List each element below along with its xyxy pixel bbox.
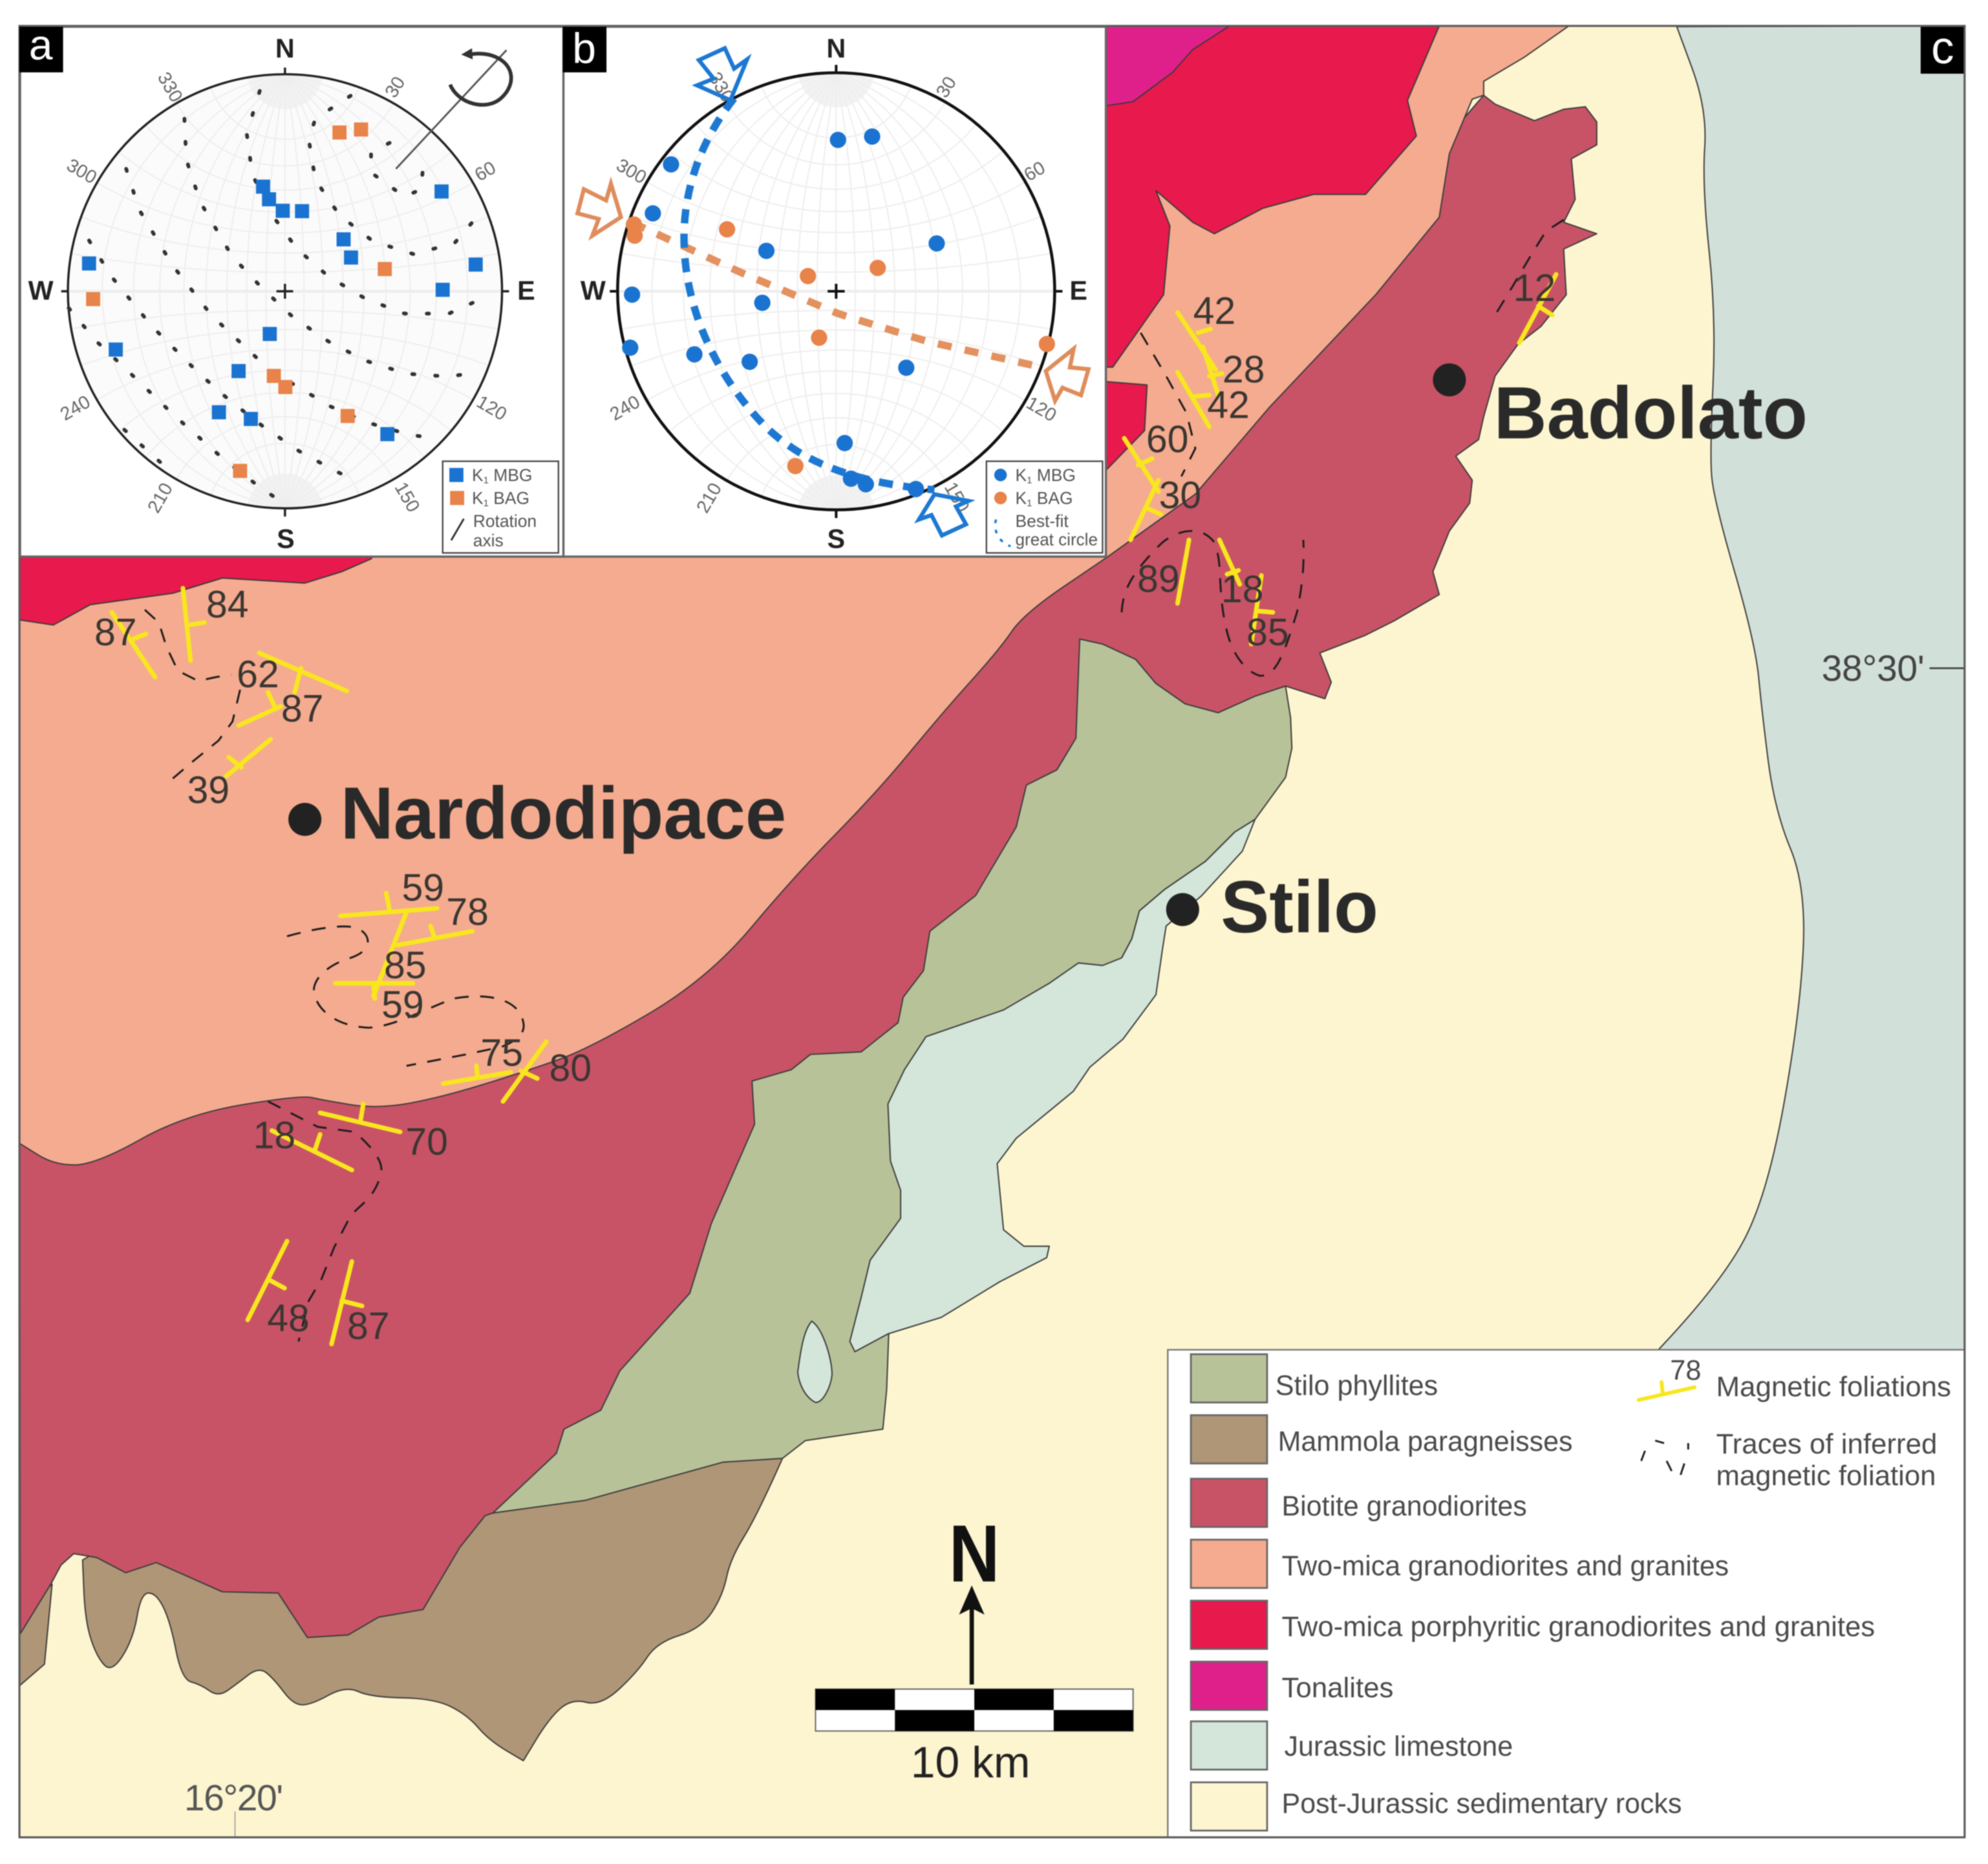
stereonet a azimuth labels: 30 — [381, 73, 409, 102]
stereonet a azimuth labels: 210 — [144, 480, 177, 517]
legend entry: Post-Jurassic sedimentary rocks: Post-Jurassic sedimentary rocks — [1282, 1788, 1682, 1819]
stereonet b cardinal labels: W — [581, 276, 606, 306]
stereonet b legend: 1 — [1027, 475, 1032, 486]
legend entry: Two-mica porphyritic granodiorites and granites: Two-mica porphyritic granodiorites and granites — [1282, 1612, 1875, 1643]
rotation axis with curved arrow — [396, 48, 511, 169]
stereonet b legend — [987, 461, 1102, 553]
foliation dip values: 87 — [94, 612, 137, 654]
foliation dip values: 12 — [1513, 268, 1555, 310]
stereonet a interior tint — [68, 74, 502, 508]
foliation dip values: 89 — [1137, 559, 1180, 601]
stereonet b legend: BAG — [1032, 488, 1073, 508]
north arrow: N — [949, 1508, 999, 1599]
best-fit great circle MBG blue dashed — [684, 98, 934, 490]
stereonet b cardinal labels: S — [828, 524, 845, 554]
stereonet b legend: MBG — [1032, 466, 1076, 485]
stereonet a azimuth labels: 120 — [473, 392, 510, 425]
foliation dip values — [94, 268, 1555, 1347]
panel label b — [562, 25, 606, 72]
stereonet b azimuth labels: 150 — [940, 478, 974, 516]
stereonet b azimuth labels: 120 — [1023, 392, 1060, 426]
foliation dip values: 18 — [1221, 568, 1263, 610]
legend entry: Biotite granodiorites: Biotite granodiorites — [1282, 1491, 1527, 1522]
legend entry: Jurassic limestone — [1191, 1721, 1513, 1770]
map unit: two-mica granodiorites and granites — [19, 26, 1569, 1165]
stereonet a legend: K — [472, 466, 484, 485]
stereonet a legend — [443, 461, 559, 553]
stereonet a K1 MBG blue squares — [82, 180, 483, 441]
north arrow — [949, 1508, 999, 1684]
stereonet a K1 BAG orange squares — [86, 122, 392, 478]
foliation dip values: 42 — [1193, 290, 1235, 332]
panel label b: b — [572, 25, 596, 72]
town: Stilo: Stilo — [1221, 866, 1378, 948]
stereonet a legend: 1 — [484, 475, 489, 486]
stereonet a rim and ticks — [61, 67, 509, 517]
foliation dip values: 59 — [402, 867, 444, 909]
foliation dip values: 59 — [381, 984, 424, 1026]
foliation dip values: 48 — [267, 1298, 310, 1340]
foliation dip values: 80 — [549, 1047, 592, 1089]
stereonet a legend: axis — [473, 531, 504, 550]
foliation dip values: 60 — [1146, 418, 1188, 460]
foliation dip values: 62 — [237, 654, 279, 696]
legend contents — [1191, 1355, 1951, 1830]
panel label c — [1921, 22, 1965, 74]
legend entry: magnetic foliations: 78 — [1670, 1355, 1701, 1386]
stereonet a azimuth labels: 330 — [153, 69, 187, 106]
legend entry: Stilo phyllites: Stilo phyllites — [1276, 1370, 1438, 1401]
legend entry: Post-Jurassic sedimentary rocks — [1191, 1783, 1682, 1830]
stereonet b azimuth labels: 30 — [932, 73, 961, 102]
stereonet a azimuth labels: 150 — [390, 478, 423, 516]
foliation dip values: 87 — [347, 1305, 390, 1347]
legend entry: Mammola paragneisses: Mammola paragneisses — [1278, 1426, 1572, 1457]
scale bar: 10 km — [911, 1739, 1030, 1787]
legend entry: Jurassic limestone: Jurassic limestone — [1284, 1731, 1513, 1762]
stereonet b grid — [617, 72, 1055, 510]
scale bar — [815, 1689, 1133, 1787]
stereonet b legend: 1 — [1027, 498, 1032, 509]
stereonet a cardinal labels: N — [275, 34, 295, 63]
stereonet a legend: K — [472, 488, 484, 508]
foliation dip values: 30 — [1159, 475, 1201, 517]
stereonet b azimuth labels: 240 — [606, 392, 644, 425]
stereonet a azimuth labels: 240 — [57, 392, 94, 425]
stereonet a legend: 1 — [484, 498, 489, 509]
arrow: orange hollow left — [577, 184, 621, 235]
limestone lens — [798, 1321, 832, 1402]
stereonet b azimuth labels: 330 — [704, 69, 738, 106]
stereonet a azimuth labels — [57, 69, 510, 517]
map unit: sea area in pale grey-green — [1659, 26, 1965, 1359]
foliation dip values: 78 — [446, 891, 489, 933]
stereonet b K1 BAG orange circles — [626, 217, 1055, 474]
panel label a: a — [29, 21, 53, 69]
foliation dip values: 75 — [480, 1032, 523, 1074]
stereonet a cardinal labels: W — [28, 276, 54, 306]
map unit: two-mica porphyritic granodiorites and granites — [19, 26, 1439, 625]
stereonet b rim and ticks — [610, 65, 1062, 518]
stereonet a cardinal labels — [28, 34, 535, 554]
panel label a — [19, 21, 63, 72]
legend entry: Biotite granodiorites — [1191, 1479, 1527, 1527]
arrow: blue hollow bottom — [919, 494, 968, 535]
stereonet b legend: great circle — [1016, 530, 1098, 550]
legend entry: magnetic foliations: Magnetic foliations — [1716, 1371, 1951, 1402]
stereonet b legend: K — [1016, 488, 1027, 508]
arrow: orange hollow right — [1046, 348, 1089, 401]
stereonet b azimuth labels: 300 — [613, 155, 650, 188]
stereonet a cardinal labels: S — [277, 524, 295, 554]
legend entry: Tonalites: Tonalites — [1282, 1673, 1393, 1704]
best-fit great circle BAG orange dashed — [632, 222, 1042, 367]
stereonet b legend: K — [1016, 466, 1027, 485]
legend entry: Mammola paragneisses — [1191, 1415, 1572, 1463]
stereonet b azimuth labels — [606, 69, 1060, 517]
legend entry: Two-mica porphyritic granodiorites and granites — [1191, 1601, 1875, 1649]
foliation dip values: 42 — [1207, 384, 1250, 426]
magnetic foliation symbols in yellow — [112, 274, 1556, 1344]
stereonet a grid — [68, 74, 502, 508]
stereonet a cardinal labels: E — [517, 276, 535, 306]
stereonet a legend: BAG — [489, 488, 529, 508]
panel label c: c — [1931, 22, 1954, 73]
foliation dip values: 18 — [253, 1115, 295, 1157]
map unit: Jurassic limestone — [798, 819, 1255, 1402]
foliation dip values: 70 — [405, 1121, 448, 1163]
legend entry: Stilo phyllites — [1191, 1355, 1438, 1402]
foliation dip values: 84 — [206, 584, 249, 626]
legend entry: Two-mica granodiorites and granites: Two-mica granodiorites and granites — [1282, 1550, 1729, 1581]
legend entry: magnetic foliations — [1639, 1355, 1951, 1402]
stereonet b K1 MBG blue circles — [622, 129, 945, 497]
panel a: stereonet of K1 axes with rotation axis — [19, 21, 564, 557]
stereonet b cardinal labels — [581, 34, 1087, 554]
map unit: biotite granodiorites — [19, 95, 1597, 1638]
legend entry: traces of inferred magnetic foliation: magnetic foliation — [1716, 1461, 1936, 1492]
stereonet a legend: Rotation — [473, 511, 537, 531]
traces of inferred magnetic foliation — [145, 220, 1564, 1342]
town: Badolato: Badolato — [1494, 372, 1808, 455]
stereonet b azimuth labels: 60 — [1021, 157, 1049, 186]
foliation dip values: 85 — [1246, 612, 1289, 654]
stereonet b cardinal labels: N — [826, 34, 846, 63]
map unit: Mammola paragneisses — [19, 1448, 782, 1761]
legend entry: Tonalites — [1191, 1662, 1393, 1710]
stereonet a azimuth labels: 300 — [63, 155, 100, 188]
longitude label: 16°20' — [184, 1777, 283, 1819]
legend entry: traces of inferred magnetic foliation — [1641, 1429, 1937, 1492]
stereonet a azimuth labels: 60 — [471, 157, 500, 186]
map unit: Stilo phyllites — [381, 639, 1292, 1513]
foliation dip values: 85 — [384, 945, 427, 987]
stereonet a legend: MBG — [489, 466, 532, 485]
stereonet a dotted great circles — [69, 91, 490, 497]
foliation dip values: 28 — [1223, 348, 1265, 391]
latitude label: 38°30' — [1822, 648, 1925, 689]
legend panel — [1168, 1350, 1965, 1837]
arrow: blue hollow top — [697, 48, 747, 100]
panel b: stereonet with best-fit great circles — [562, 25, 1106, 557]
town: Nardodipace: Nardodipace — [341, 773, 786, 855]
legend entry: Two-mica granodiorites and granites — [1191, 1539, 1729, 1588]
foliation dip values: 87 — [281, 688, 323, 730]
foliation dip values: 39 — [187, 769, 230, 811]
stereonet b cardinal labels: E — [1069, 276, 1087, 306]
stereonet b azimuth labels: 210 — [692, 480, 726, 517]
legend entry: traces of inferred magnetic foliation: Traces of inferred — [1716, 1429, 1937, 1460]
stereonet b legend: Best-fit — [1016, 511, 1069, 531]
map unit: tonalites — [1100, 26, 1230, 107]
